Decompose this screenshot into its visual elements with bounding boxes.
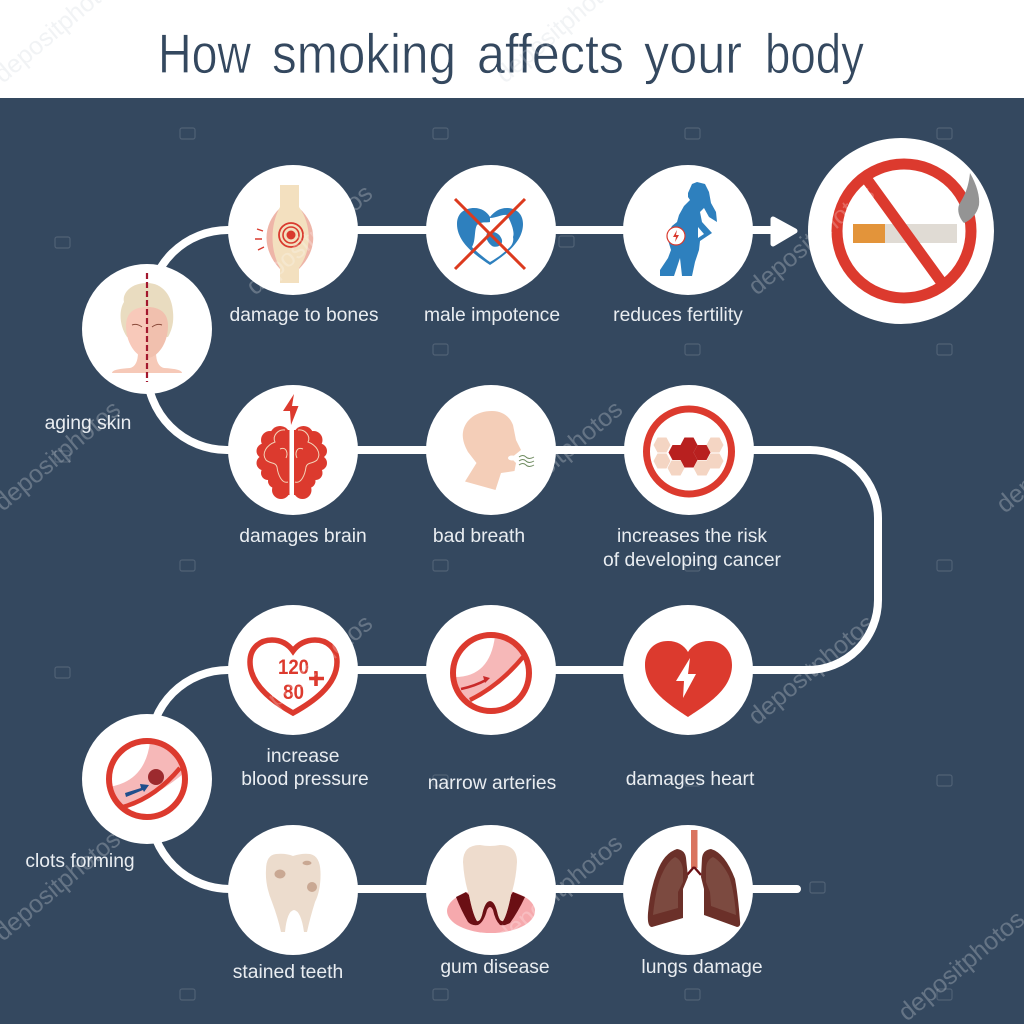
node: increase blood pressure bbox=[228, 605, 358, 735]
label: damages heart: damages heart bbox=[626, 769, 755, 790]
label: clots forming: clots forming bbox=[25, 851, 135, 872]
label: increases the risk of developing cancer: increases the risk bbox=[617, 526, 767, 547]
watermark: depositphotos bbox=[491, 829, 628, 951]
node: damages heart bbox=[623, 605, 753, 735]
node: damage to bones bbox=[228, 165, 358, 295]
node: aging skin bbox=[82, 264, 212, 394]
node: cancer risk bbox=[624, 385, 754, 515]
label: increase blood pressure: increase bbox=[267, 746, 339, 767]
title: How bbox=[158, 22, 251, 85]
label: narrow arteries: narrow arteries bbox=[428, 773, 556, 794]
title: your bbox=[644, 22, 742, 85]
header band bbox=[0, 0, 1024, 98]
arrow head bbox=[773, 219, 795, 244]
node: narrow arteries bbox=[426, 605, 556, 735]
title: smoking bbox=[272, 22, 456, 85]
label: reduces fertility: reduces fertility bbox=[613, 305, 743, 326]
node: lungs damage bbox=[623, 825, 753, 955]
node: reduces fertility bbox=[623, 165, 753, 295]
watermark: depositphotos bbox=[241, 179, 378, 301]
node: increase blood pressure: 120 bbox=[278, 656, 309, 679]
label: lungs damage: lungs damage bbox=[641, 957, 763, 978]
connecting path bbox=[147, 230, 878, 889]
node: clots forming bbox=[82, 714, 212, 844]
watermark: depositphotos bbox=[743, 609, 880, 731]
camera marks bbox=[55, 128, 952, 1000]
label: damages brain: damages brain bbox=[239, 526, 367, 547]
label: gum disease: gum disease bbox=[440, 957, 550, 978]
watermark: depositphotos bbox=[241, 609, 378, 731]
watermark: depositphotos bbox=[491, 395, 628, 517]
label: damage to bones: damage to bones bbox=[229, 305, 379, 326]
node: male impotence bbox=[426, 165, 556, 295]
node: increase blood pressure: 80 bbox=[283, 681, 304, 704]
label: male impotence: male impotence bbox=[424, 305, 560, 326]
node: bad breath bbox=[426, 385, 556, 515]
title: body bbox=[765, 22, 864, 85]
node: damages brain bbox=[228, 385, 358, 515]
label: increase blood pressure: blood pressure bbox=[241, 769, 369, 790]
watermark: depositphotos bbox=[743, 179, 880, 301]
label: stained teeth: stained teeth bbox=[233, 962, 343, 983]
label: bad breath: bad breath bbox=[433, 526, 525, 547]
node: stained teeth bbox=[228, 825, 358, 955]
label: increases the risk of developing cancer: of developing cancer bbox=[603, 550, 782, 571]
title: affects bbox=[477, 22, 624, 85]
label: aging skin: aging skin bbox=[45, 413, 131, 434]
node: gum disease bbox=[426, 825, 556, 955]
node: no smoking sign bbox=[808, 138, 994, 324]
